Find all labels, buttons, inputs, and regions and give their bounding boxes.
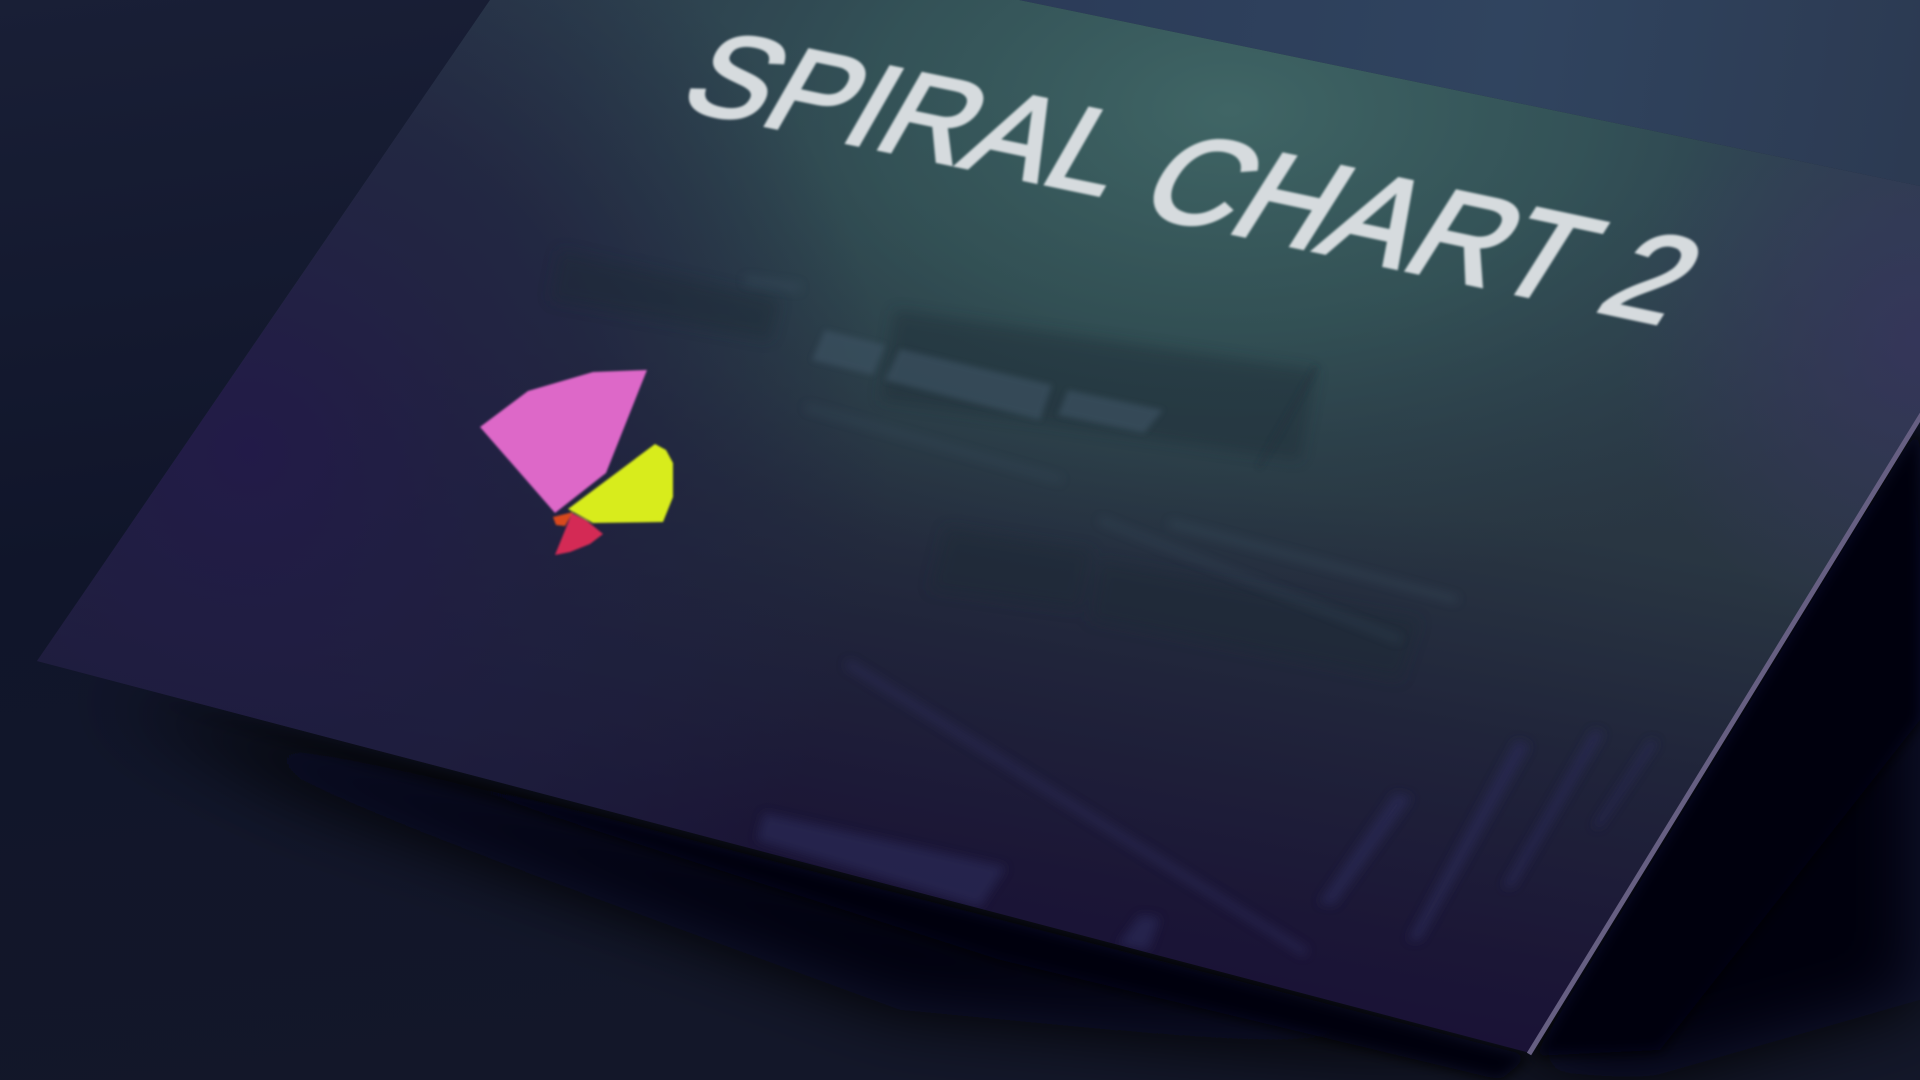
segment: yellow [568, 444, 673, 523]
title: SPIRAL [662, 8, 1159, 220]
spiral chart [480, 370, 673, 555]
title: CHART 2 [1118, 108, 1728, 349]
segment: pink [480, 370, 647, 513]
right edge highlight of panel [1529, 414, 1920, 1054]
title [662, 8, 1728, 349]
segment: red [555, 513, 603, 555]
slab drop shadow [100, 416, 1920, 1080]
faint photo texture on panel [758, 306, 1654, 953]
segment: orange [553, 512, 573, 526]
